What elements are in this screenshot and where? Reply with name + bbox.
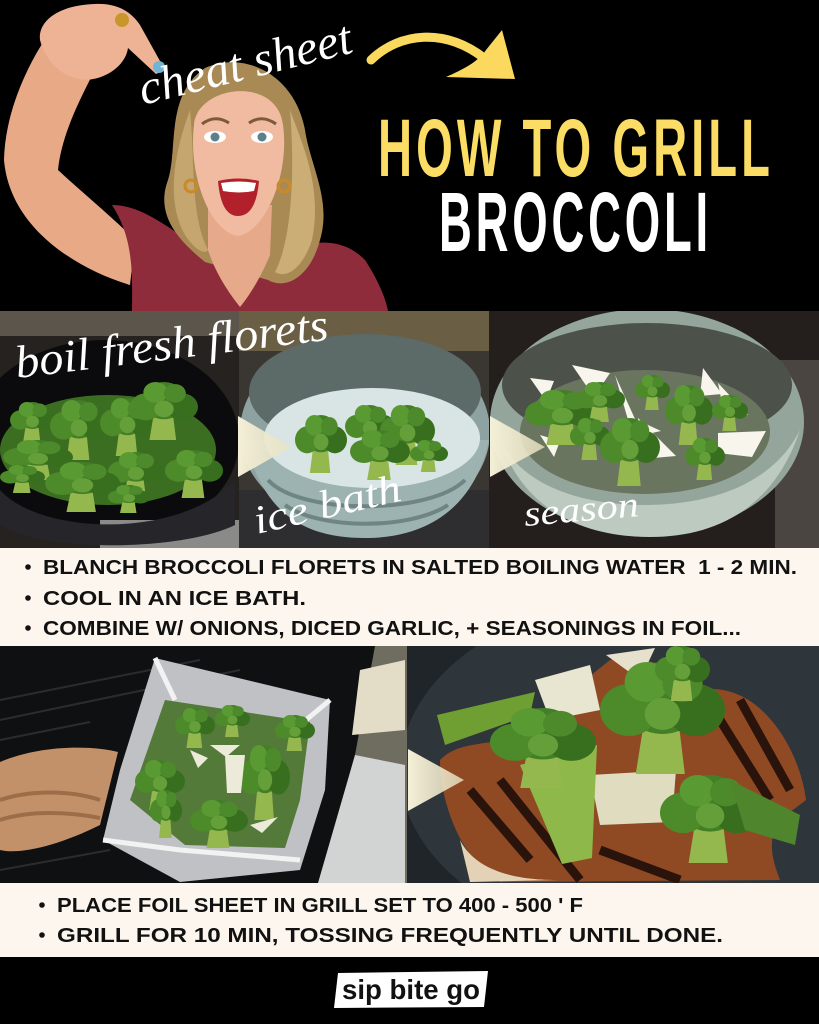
face: [193, 91, 284, 236]
photo: boiling florets in pot: [0, 311, 239, 548]
step list: COOL IN AN ICE BATH.: [43, 588, 306, 610]
photo: foil packet on grill: [0, 646, 407, 883]
panel: first instruction band: [0, 548, 819, 646]
photo: ice bath bowl: [239, 311, 490, 548]
eyes: [204, 131, 226, 143]
footer background: [0, 957, 819, 1024]
photo: seasoned broccoli bowl: [489, 309, 819, 548]
arrow: yellow curved: [371, 30, 515, 79]
dress: [112, 205, 388, 311]
pointing hand: [40, 4, 165, 80]
logo: sip bite go: sip bite go: [342, 974, 480, 1005]
title: [378, 103, 774, 269]
arrow: triangle 2: [490, 416, 545, 477]
step list: GRILL FOR 10 MIN, TOSSING FREQUENTLY UNTIL DONE.: [57, 925, 723, 947]
step list: BLANCH BROCCOLI FLORETS IN SALTED BOILING WATER 1 - 2 MIN.: [43, 557, 797, 579]
neck and chest: [208, 205, 272, 307]
step list: [25, 557, 797, 640]
label: ice bath: ice bath: [249, 465, 405, 543]
broccoli mass: [0, 395, 216, 505]
step list: [39, 895, 723, 947]
pointing arm: [4, 32, 135, 285]
step list: COMBINE W/ ONIONS, DICED GARLIC, + SEASONINGS IN FOIL...: [43, 618, 741, 640]
arrow: triangle 1: [238, 416, 291, 477]
label: cheat sheet: cheat sheet: [133, 11, 359, 116]
label: season: season: [522, 484, 640, 534]
arrow: triangle 3: [408, 749, 464, 811]
photo: woman pointing: [4, 4, 388, 311]
header background: [0, 0, 819, 311]
hair: [164, 62, 324, 283]
step list: PLACE FOIL SHEET IN GRILL SET TO 400 - 500 ' F: [57, 895, 583, 917]
photo: plated grilled chicken and broccoli: [407, 646, 819, 883]
earrings: [185, 180, 197, 192]
mouth: [218, 178, 259, 216]
label: boil fresh florets: boil fresh florets: [12, 299, 331, 388]
panel: second instruction band: [0, 883, 819, 957]
